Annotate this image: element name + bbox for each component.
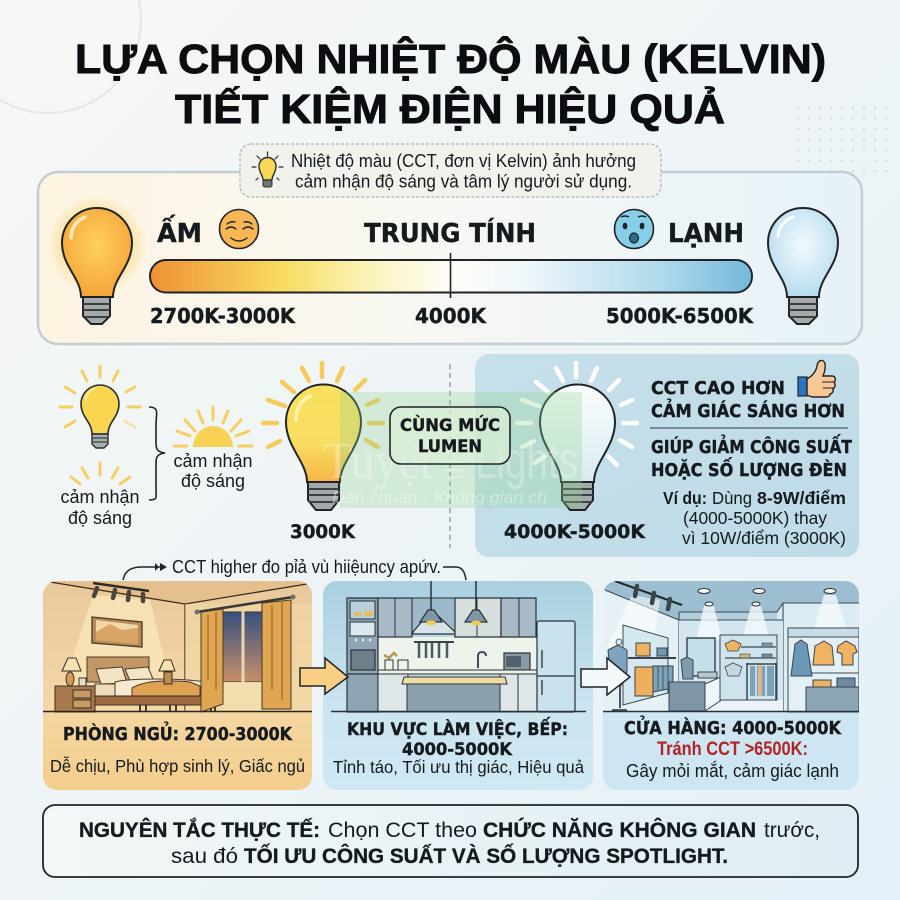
text: store heading: CỬA HÀNG: 4000-5000K — [624, 715, 842, 739]
label: neutral value: 4000K — [415, 304, 487, 328]
bracket — [149, 407, 165, 500]
icon: 4000K-5000K bulb with rays — [517, 363, 637, 510]
text: definition — [291, 151, 636, 192]
text: example: Dùng — [712, 488, 752, 508]
icon: small yellow bulb with rays — [60, 366, 140, 448]
text: rule line one: trước, — [764, 819, 820, 842]
icon: lower rays — [71, 463, 130, 484]
text: kitchen heading: KHU VỰC LÀM VIỆC, BẾP: — [347, 716, 568, 740]
text: rule line one: NGUYÊN TẮC THỰC TẾ: — [79, 818, 320, 842]
text: rule line one — [79, 818, 820, 842]
icon: calm face — [220, 210, 258, 248]
text: store warning: Tránh CCT >6500K: — [657, 739, 808, 760]
arrow: bedroom to kitchen — [300, 658, 348, 694]
text: higher CCT feels brighter: CCT CAO HƠN — [651, 378, 785, 399]
panel: Kelvin colour scale — [38, 172, 862, 344]
panel: higher CCT benefit background — [475, 354, 859, 557]
text: bedroom benefits: Dễ chịu, Phù hợp sinh lý, Giấc ngủ — [50, 755, 305, 776]
heading: neutral: TRUNG TÍNH — [364, 217, 536, 249]
text: perception left: cảm nhận — [60, 487, 140, 507]
icon: half sun — [174, 407, 252, 447]
text: rule line one: Chọn CCT theo — [328, 819, 477, 842]
label: 4000K-5000K: 4000K-5000K — [504, 521, 646, 543]
label: cold range: 5000K-6500K — [606, 304, 754, 328]
text: example — [663, 488, 846, 548]
text: helps reduce power: HOẶC SỐ LƯỢNG ĐÈN — [651, 457, 847, 481]
heading: warm: ẤM — [157, 213, 202, 249]
icon: small idea bulb — [252, 152, 283, 187]
icon: thumbs up — [798, 360, 835, 397]
text: example: vì 10W/điểm (3000K) — [682, 528, 846, 548]
label: 3000K: 3000K — [290, 521, 356, 543]
panel: practical rule — [43, 805, 858, 877]
icon: warm bulb — [47, 195, 147, 324]
text: example: (4000-5000K) thay — [683, 508, 827, 528]
text: rule line two: sau đó — [171, 845, 238, 868]
illustration: store — [603, 581, 859, 712]
text: helps reduce power — [651, 434, 853, 481]
text: perception left — [60, 487, 140, 528]
icon: cold bulb — [768, 208, 838, 324]
arrow: kitchen to store — [581, 658, 630, 695]
label: same lumen: CÙNG MỨC — [400, 414, 500, 436]
illustration: bedroom — [43, 581, 312, 712]
panel: store — [603, 581, 859, 790]
dot grid decoration — [794, 104, 894, 172]
text: example: Ví dụ: — [663, 488, 707, 508]
text: helps reduce power: GIÚP GIẢM CÔNG SUẤT — [651, 434, 853, 458]
text: higher CCT feels brighter — [651, 378, 845, 422]
title — [75, 36, 826, 132]
text: definition: Nhiệt độ màu (CCT, đơn vị Kelvin) ảnh hưởng — [291, 151, 636, 171]
divider line — [650, 427, 848, 429]
text: example: 8-9W/điểm — [757, 488, 846, 508]
icon: cold face — [614, 210, 654, 248]
text: bedroom heading: PHÒNG NGỦ: 2700-3000K — [63, 721, 293, 745]
heading: cold: LẠNH — [668, 219, 744, 249]
divider: dashed — [449, 364, 451, 548]
text: perception right — [173, 451, 253, 491]
icon: 3000K bulb with rays — [263, 363, 383, 510]
gradient bar — [150, 253, 752, 298]
text: kitchen benefits: Tỉnh táo, Tối ưu thị giác, Hiệu quả — [333, 757, 584, 777]
annotation: connector caption: CCT higher đo pỉả vù hiiệuncy apứv. — [172, 556, 441, 577]
text: higher CCT feels brighter: CẢM GIÁC SÁNG HƠN — [651, 399, 845, 422]
title: LỰA CHỌN NHIỆT ĐỘ MÀU (KELVIN) — [75, 36, 826, 82]
watermark: Lights — [475, 432, 578, 490]
watermark — [323, 392, 582, 508]
watermark: Tuyệt — [323, 433, 434, 490]
group: lower CCT perception icons — [60, 366, 253, 528]
text: perception right: cảm nhận — [173, 451, 253, 471]
text: rule line one: CHỨC NĂNG KHÔNG GIAN — [483, 818, 756, 842]
panel: kitchen — [323, 581, 593, 790]
callout: CCT definition — [240, 144, 661, 197]
text: definition: cảm nhận độ sáng và tâm lý người sử dụng. — [295, 172, 632, 192]
text: kitchen heading: 4000-5000K — [402, 740, 513, 760]
label: warm range: 2700K-3000K — [150, 304, 296, 328]
label: same lumen — [390, 407, 510, 464]
text: store warning detail: Gây mỏi mắt, cảm giác lạnh — [626, 760, 839, 781]
text: rule line two: TỐI ƯU CÔNG SUẤT VÀ SỐ LƯỢNG SPOTLIGHT. — [244, 844, 728, 868]
watermark: Đèn chuẩn - Không gian ch — [332, 488, 547, 507]
illustration: kitchen — [331, 581, 586, 712]
title: TIẾT KIỆM ĐIỆN HIỆU QUẢ — [175, 86, 725, 132]
label: same lumen: LUMEN — [418, 437, 482, 457]
text: kitchen heading — [347, 716, 568, 760]
text: perception left: độ sáng — [68, 508, 132, 528]
panel: bedroom — [43, 581, 312, 790]
text: perception right: độ sáng — [181, 471, 245, 491]
